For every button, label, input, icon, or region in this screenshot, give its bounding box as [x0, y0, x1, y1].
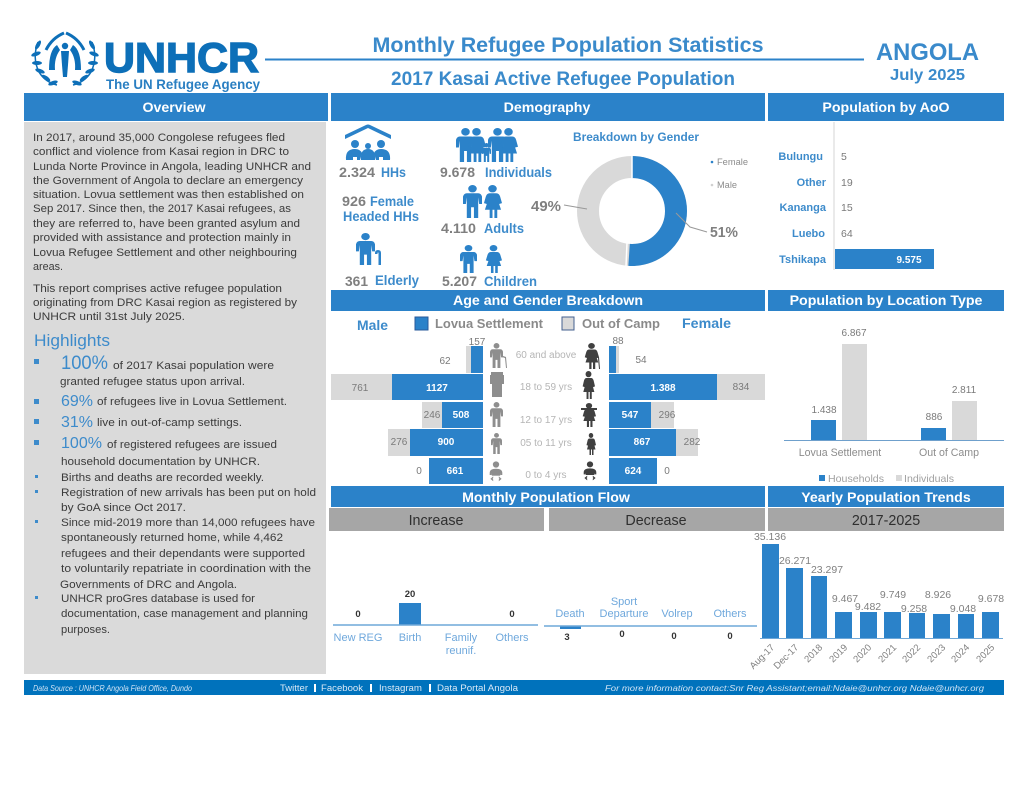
chart: population by AoO: 5: [841, 151, 847, 163]
stat: households: [339, 164, 406, 180]
heading: Monthly Population Flow: Monthly Population Flow: [462, 490, 631, 506]
chart: yearly population trends: 26.271: [779, 555, 811, 567]
stat: elderly: [345, 272, 419, 289]
list: highlights: Governments of DRC and Angola.: [60, 579, 237, 591]
text block: intro: conflict and violence from Kasai region in DRC to: [33, 146, 289, 158]
stat: elderly: 361: [345, 273, 368, 289]
chart: population by AoO: Kananga: [780, 202, 827, 214]
chart: monthly increase: 0: [509, 609, 515, 620]
heading: Yearly Population Trends: [768, 486, 1004, 507]
text block: intro: Sep 2017. Since then, the 2017 Kasai refugees, as: [33, 203, 292, 215]
chart: population by AoO: Bulungu: [778, 151, 823, 163]
text block: intro: [33, 132, 311, 273]
chart: gender donut: [531, 155, 738, 266]
chart: monthly increase: New REG: [334, 632, 382, 644]
chart: yearly population trends: 2025: [974, 642, 997, 665]
chart: yearly population trends: 9.749: [880, 589, 906, 601]
chart: population by AoO: [778, 122, 934, 270]
chart: yearly population trends: Dec-17: [772, 642, 801, 672]
stat: female headed households: Headed HHs: [343, 208, 419, 224]
values: pyramid grey labels: 0: [416, 466, 422, 477]
list: highlights: to voluntarily repatriate in coordination with the: [61, 563, 311, 575]
text block: intro: they are referred to, have been granted asylum and: [33, 218, 300, 230]
values: pyramid grey labels: 282: [684, 437, 701, 448]
footer: Data Portal Angola: [437, 683, 518, 693]
chart: monthly increase: reunif.: [446, 645, 476, 657]
heading: Population by AoO: [768, 93, 1004, 121]
heading: Population by AoO: Population by AoO: [822, 100, 950, 116]
list: highlights: of refugees live in Lovua Settlement.: [97, 396, 287, 408]
text block: intro: Lunda Norte Province in Angola, leading UNHCR and: [33, 161, 311, 173]
chart: monthly decrease: Volrep: [661, 608, 693, 620]
list: highlights: live in out-of-camp settings.: [97, 417, 242, 429]
bars: out of camp: [331, 346, 765, 456]
chart: yearly population trends: 2018: [802, 642, 825, 665]
icons: female age figures: [581, 343, 600, 480]
chart: yearly population trends: 2023: [925, 642, 948, 665]
footer: Data Source : UNHCR Angola Field Office, Dundo: [33, 684, 192, 693]
heading: Age and Gender Breakdown: Age and Gender Breakdown: [453, 293, 643, 309]
age labels: [516, 350, 577, 481]
subheading: Increase: Increase: [409, 513, 463, 529]
values: pyramid white labels: [426, 383, 676, 477]
subheading: Increase: [329, 508, 544, 531]
chart: population by AoO: 19: [841, 177, 853, 189]
chart: monthly increase: 0: [355, 609, 361, 620]
legend: location type: Individuals: [904, 473, 954, 485]
chart: monthly decrease: Others: [713, 608, 747, 620]
footer: Twitter: [280, 683, 308, 693]
chart: yearly population trends: 2019: [827, 642, 850, 665]
chart: yearly population trends: 35.136: [754, 531, 786, 543]
text block: intro: In 2017, around 35,000 Congolese refugees fled: [33, 132, 285, 144]
chart: monthly decrease: Sport: [611, 596, 637, 608]
list: highlights: 100%: [61, 435, 102, 452]
list: highlights: granted refugee status upon arrival.: [60, 376, 245, 388]
chart: yearly population trends: 8.926: [925, 589, 951, 601]
panel: demography: [339, 124, 748, 289]
chart: population by AoO: 9.575: [896, 255, 922, 266]
chart: population by AoO: Other: [797, 177, 827, 189]
list: highlights: of 2017 Kasai population were: [113, 360, 274, 372]
chart: monthly increase: Others: [495, 632, 529, 644]
values: pyramid grey labels: 0: [664, 466, 670, 477]
stat: adults: [441, 220, 524, 236]
title: Monthly Refugee Population Statistics: [372, 33, 764, 57]
chart: yearly population trends: 9.258: [901, 603, 927, 615]
heading: Yearly Population Trends: Yearly Population Trends: [801, 490, 971, 506]
chart: monthly decrease: 0: [619, 629, 625, 640]
heading: Demography: Demography: [504, 100, 590, 116]
chart: monthly decrease: Death: [555, 608, 585, 620]
chart: monthly decrease: [544, 596, 757, 643]
legend: pyramid: Male: [357, 318, 389, 333]
legend: pyramid: Lovua Settlement: [435, 316, 544, 331]
chart: yearly population trends: 9.467: [832, 593, 858, 605]
icon: elderly: [356, 233, 381, 265]
text block: report scope: This report comprises active refugee population: [33, 283, 282, 295]
values: pyramid grey labels: 54: [635, 355, 647, 366]
footer: [24, 680, 1004, 695]
heading: Overview: [24, 93, 328, 121]
bars: Lovua settlement: [392, 346, 717, 484]
icon: individuals: [456, 128, 518, 162]
list: highlights: Registration of new arrivals has been put on hold: [61, 487, 316, 499]
stat: individuals: Individuals: [485, 164, 552, 180]
footer: Instagram: [379, 683, 422, 693]
chart: population by AoO: 15: [841, 202, 853, 214]
age labels: 12 to 17 yrs: [520, 415, 572, 426]
values: pyramid white labels: 1127: [426, 383, 448, 394]
values: pyramid grey labels: 296: [659, 410, 676, 421]
legend: pyramid: [357, 316, 732, 333]
text block: report scope: originating from DRC Kasai region as registered by: [33, 297, 298, 309]
stat: children: Children: [484, 273, 537, 289]
text block: intro: the Government of Angola to declare an emergency: [33, 175, 304, 187]
stat: children: [442, 273, 537, 289]
chart: population by location type: Lovua Settlement: [799, 447, 881, 459]
list: highlights: household documentation by UNHCR.: [61, 456, 260, 468]
age labels: 0 to 4 yrs: [525, 470, 567, 481]
stat: children: 5.207: [442, 273, 477, 289]
stat: adults: 4.110: [441, 220, 476, 236]
chart: population by AoO: Luebo: [792, 228, 825, 240]
chart: population by location type: 1.438: [811, 405, 837, 416]
list: highlights: documentation, case management and planning: [61, 608, 308, 620]
text block: report scope: UNHCR until 31st July 2025.: [33, 311, 185, 323]
legend: gender: Male: [717, 180, 737, 190]
subheading: Decrease: [549, 508, 765, 531]
stat: female headed households: [342, 193, 419, 224]
legend: gender: [711, 157, 748, 190]
stat: female headed households: Female: [370, 193, 414, 209]
chart: population by location type: 6.867: [841, 328, 867, 339]
text block: intro: provided with assistance and protection mainly in: [33, 232, 291, 244]
heading: Demography: [331, 93, 765, 121]
heading: Population by Location Type: Population by Location Type: [790, 293, 983, 309]
wordmark: UNHCR: [104, 34, 259, 81]
chart: yearly population trends: 2022: [900, 642, 923, 665]
chart: monthly increase: [333, 589, 538, 657]
chart: yearly population trends: 2021: [876, 642, 899, 665]
chart: yearly population trends: 23.297: [811, 564, 843, 576]
stat: individuals: 9.678: [440, 164, 475, 180]
icon: UNHCR emblem: [31, 33, 99, 87]
stat: adults: Adults: [484, 220, 524, 236]
text block: intro: areas.: [33, 261, 63, 273]
age labels: 05 to 11 yrs: [520, 438, 572, 449]
heading: Overview: Overview: [142, 100, 207, 116]
list: highlights: UNHCR proGres database is used for: [61, 593, 255, 605]
list: highlights: spontaneously returned home, while 4,462: [61, 532, 283, 544]
values: pyramid grey labels: 761: [352, 383, 369, 394]
icon: adults: [463, 185, 502, 218]
values: pyramid grey labels: 62: [439, 356, 451, 367]
list: highlights: refugees and their dependants were supported: [61, 548, 305, 560]
subtitle: 2017 Kasai Active Refugee Population: [391, 69, 735, 90]
legend: pyramid: Female: [682, 316, 732, 331]
subheading: Decrease: Decrease: [625, 513, 687, 529]
heading: Population by Location Type: [768, 290, 1004, 311]
chart: yearly population trends: [748, 531, 1004, 672]
list: highlights: 69%: [61, 393, 93, 410]
values: pyramid grey labels: 834: [733, 382, 750, 393]
values: pyramid white labels: 508: [453, 410, 470, 421]
chart: yearly population trends: Aug-17: [748, 642, 777, 672]
subheading: 2017-2025: 2017-2025: [852, 513, 920, 529]
legend: location type: Households: [828, 473, 884, 485]
heading: Highlights: Highlights: [34, 332, 110, 350]
chart: monthly increase: Family: [445, 632, 478, 644]
chart: monthly decrease: 0: [671, 631, 677, 642]
chart: gender donut: 51%: [710, 225, 738, 241]
values: pyramid white labels: 547: [622, 410, 639, 421]
list: highlights: Births and deaths are recorded weekly.: [61, 472, 264, 484]
chart: monthly decrease: 3: [564, 632, 570, 643]
chart: monthly increase: Birth: [399, 632, 421, 644]
list: highlights: purposes.: [61, 624, 110, 636]
legend: location type: [819, 473, 954, 485]
chart: yearly population trends: 9.678: [978, 593, 1004, 605]
list: highlights: by GoA since Oct 2017.: [61, 502, 186, 514]
footer: For more information contact:Snr Reg Assistant;email:Ndaie@unhcr.org Ndaie@unhcr.org: [605, 684, 985, 693]
panel: age and gender pyramid: [331, 316, 765, 484]
panel: overview: [24, 122, 326, 674]
chart: population by location type: [784, 328, 1004, 485]
list: highlights: 31%: [61, 414, 93, 431]
values: pyramid white labels: 900: [438, 437, 455, 448]
chart: population by location type: Out of Camp: [919, 447, 979, 459]
chart: yearly population trends: 2024: [949, 642, 972, 665]
date: July 2025: [890, 67, 965, 84]
chart: monthly increase: 20: [405, 589, 415, 600]
text block: intro: situation. Lovua settlement was then established on: [33, 189, 304, 201]
icons: male age figures: [490, 343, 507, 481]
tagline: The UN Refugee Agency: [106, 76, 260, 92]
values: pyramid grey labels: 276: [391, 437, 408, 448]
values: pyramid grey labels: 246: [424, 410, 441, 421]
logo: UNHCR: [31, 33, 260, 92]
values: pyramid white labels: 867: [634, 437, 651, 448]
stat: individuals: [440, 164, 552, 180]
heading: Monthly Population Flow: [331, 486, 765, 507]
values: pyramid white labels: 624: [625, 466, 642, 477]
age labels: 18 to 59 yrs: [520, 382, 572, 393]
chart: monthly decrease: 0: [727, 631, 733, 642]
header rule: [265, 58, 864, 60]
stat: elderly: Elderly: [375, 272, 419, 288]
icon: household: [345, 124, 391, 160]
chart: population by location type: 886: [926, 412, 943, 423]
stat: households: HHs: [381, 164, 406, 180]
chart: population by AoO: Tshikapa: [779, 254, 827, 266]
text block: intro: Lovua Refugee Settlement and other neighbouring: [33, 247, 297, 259]
country: ANGOLA: [876, 39, 979, 66]
values: pyramid grey labels: 157: [469, 337, 486, 348]
chart: population by AoO: 64: [841, 228, 853, 240]
chart: yearly population trends: 2020: [851, 642, 874, 665]
list: highlights: 100%: [61, 353, 108, 374]
legend: pyramid: Out of Camp: [582, 316, 660, 331]
age labels: 60 and above: [516, 350, 577, 361]
icon: children: [460, 245, 502, 273]
chart: yearly population trends: 9.482: [855, 601, 881, 613]
stat: households: 2.324: [339, 164, 375, 180]
text block: report scope: [33, 283, 298, 323]
list: highlights: Since mid-2019 more than 14,000 refugees have: [61, 517, 315, 529]
legend: gender: Female: [717, 157, 748, 167]
list: highlights: [34, 353, 316, 636]
chart: population by location type: 2.811: [952, 385, 977, 396]
values: pyramid grey labels: 88: [612, 336, 624, 347]
chart: monthly decrease: Departure: [600, 608, 648, 620]
subheading: 2017-2025: [768, 508, 1004, 531]
values: pyramid white labels: 1.388: [650, 383, 676, 394]
chart: yearly population trends: 9.048: [950, 603, 976, 615]
footer: Facebook: [321, 683, 364, 693]
heading: Age and Gender Breakdown: [331, 290, 765, 311]
chart: gender donut: 49%: [531, 199, 561, 215]
values: pyramid grey labels: [352, 336, 750, 477]
list: highlights: of registered refugees are issued: [107, 439, 277, 451]
heading: breakdown by gender: Breakdown by Gender: [573, 130, 699, 144]
stat: female headed households: 926: [342, 193, 366, 209]
values: pyramid white labels: 661: [447, 466, 464, 477]
